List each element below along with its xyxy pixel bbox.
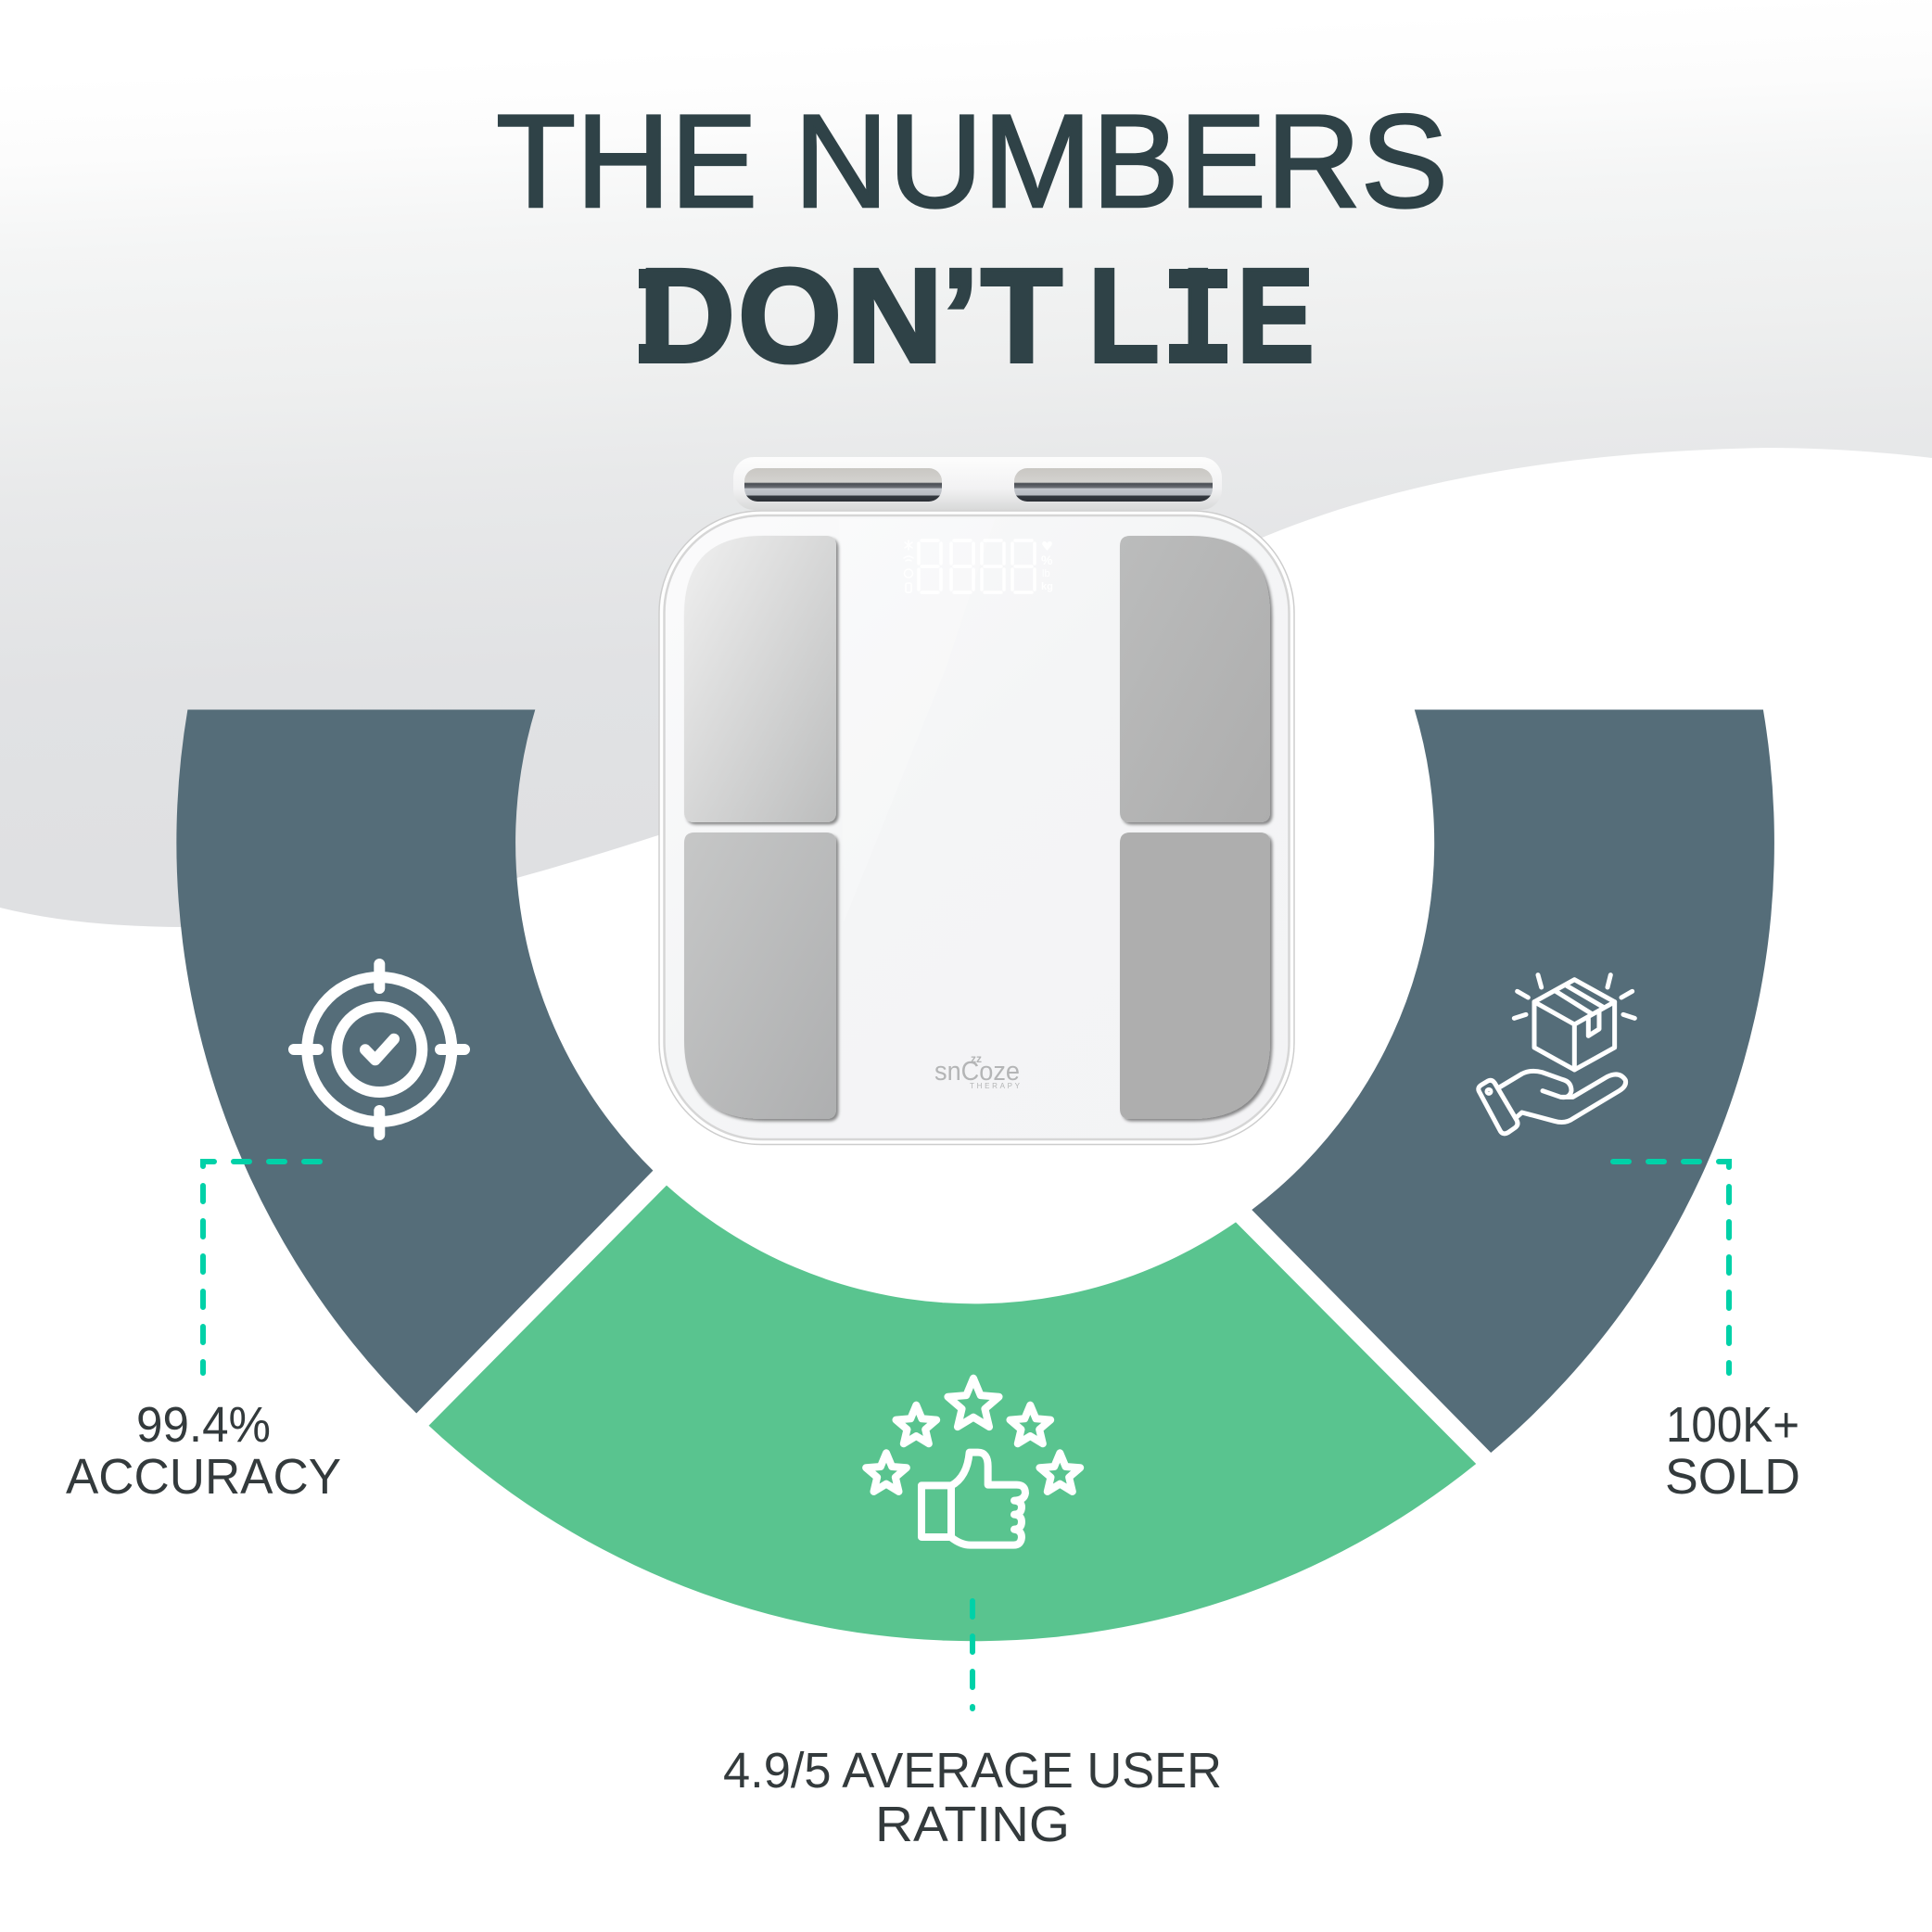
label: rating: 4.9/5 AVERAGE USER xyxy=(723,1743,1222,1799)
icon: thumbs up with five stars xyxy=(866,1379,1080,1545)
electrode bottom right xyxy=(1120,833,1270,1119)
electrode top right xyxy=(1120,536,1270,822)
snooze therapy logo: THERAPY xyxy=(970,1082,1021,1090)
icon: box over open hand xyxy=(1479,975,1634,1134)
icon: target with check xyxy=(294,964,464,1135)
snooze therapy logo: snCoze xyxy=(934,1057,1020,1087)
product: body composition scale xyxy=(659,457,1294,1144)
label: sold: SOLD xyxy=(1665,1449,1800,1505)
arc segment: sold xyxy=(1252,710,1774,1453)
label: sold xyxy=(1665,1397,1800,1505)
title line one: THE NUMBERS xyxy=(496,88,1448,235)
label: rating xyxy=(723,1743,1222,1852)
scale inner edge xyxy=(664,515,1289,1139)
scale body xyxy=(659,511,1294,1144)
label: accuracy xyxy=(66,1397,341,1505)
glass sheen xyxy=(839,519,995,922)
led display xyxy=(904,540,1053,592)
title line two: LIE xyxy=(1088,241,1315,390)
electrode top left xyxy=(684,536,836,822)
label: sold: 100K+ xyxy=(1666,1397,1799,1453)
dashed leader: sold xyxy=(1613,1162,1729,1373)
arc segment: accuracy xyxy=(176,710,653,1413)
led display: kg xyxy=(1041,581,1053,592)
scale handle xyxy=(733,457,1222,510)
label: rating: RATING xyxy=(875,1797,1070,1852)
arc segment: rating xyxy=(428,1186,1476,1641)
background wave xyxy=(0,0,1932,927)
title xyxy=(496,88,1448,390)
dashed leader: rating xyxy=(970,1601,975,1709)
label: accuracy: ACCURACY xyxy=(66,1449,341,1505)
snooze therapy logo: zz xyxy=(971,1052,982,1065)
label: accuracy: 99.4% xyxy=(136,1397,271,1453)
title line two xyxy=(639,241,1315,390)
electrode bottom left xyxy=(684,833,836,1119)
dashed leader: accuracy xyxy=(203,1162,320,1373)
title line two: DON’T xyxy=(639,241,1062,390)
led display: lb xyxy=(1042,568,1050,579)
led display: % xyxy=(1041,553,1053,567)
